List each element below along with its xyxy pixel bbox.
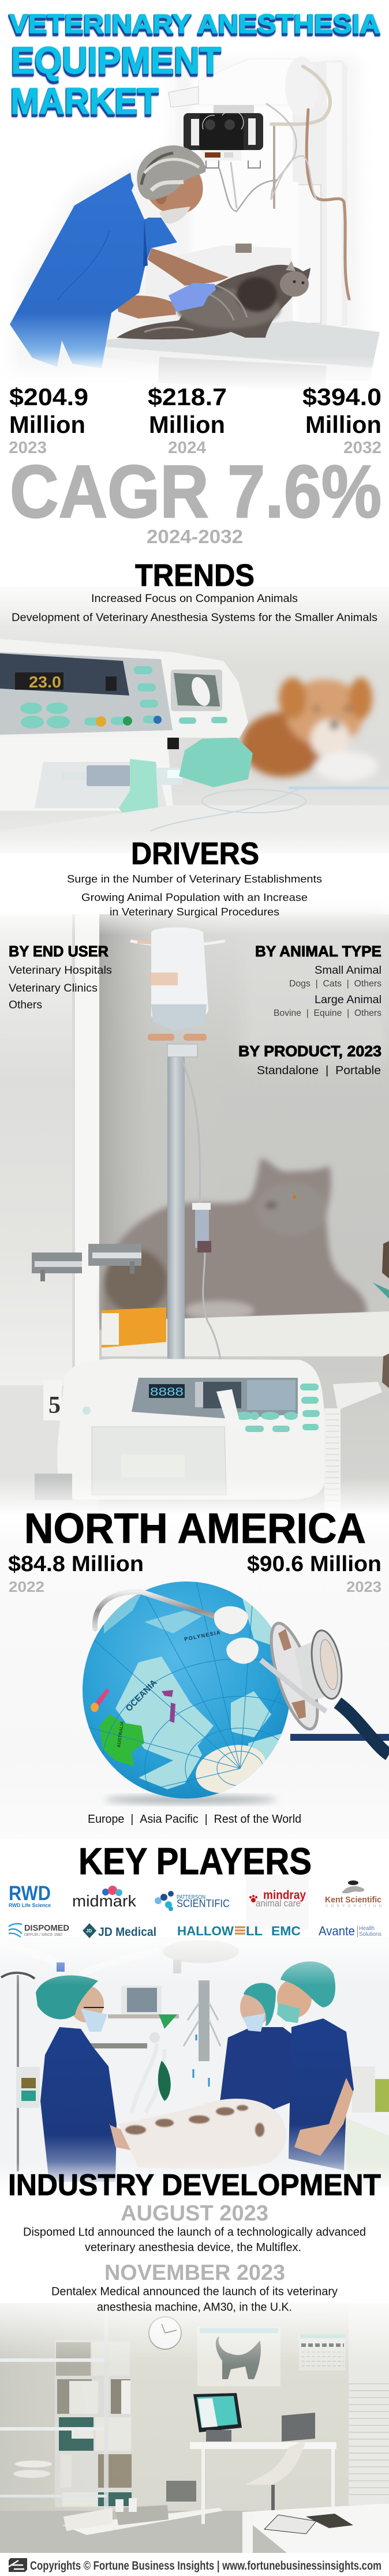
middle nurse [219,1983,300,2113]
segment: by end user: Veterinary Clinics [9,982,98,994]
segment: by animal type [255,943,381,1018]
pump panel [83,1378,320,1433]
drivers heading: DRIVERS [131,836,259,871]
anatomy poster [197,2327,280,2386]
title [9,9,380,122]
arm far [148,248,229,286]
globe with stethoscope: AUSTRALIA [116,1721,125,1748]
region values [8,1552,381,1595]
logo: Dispomed [9,1923,69,1937]
logo: Hallowell EMC: LL [246,1924,263,1938]
drivers text: Surge in the Number of Veterinary Establishments [67,873,322,885]
development: November 2023: anesthesia machine, AM30, in the U.K. [97,2301,292,2313]
hero photo: veterinarian with cat at x-ray table [0,57,389,392]
shelf and orange bowl [102,1307,389,1356]
stat: 2032 value: $394.0 [302,383,381,410]
globe with stethoscope [83,1582,389,1807]
logos: second row [9,1923,381,1939]
logo: Hallowell EMC: HALLOW [177,1924,234,1938]
machine and table fade [0,355,389,392]
cage number label [43,1380,62,1420]
development: August 2023: veterinary anesthesia device, the Multiflex. [85,2241,301,2254]
segment: by end user [9,943,112,1011]
table back and clamp [144,245,293,323]
IV stand [1,1973,40,2171]
desk, chair, computer [190,2393,336,2524]
logo: Hallowell EMC: EMC [271,1924,301,1938]
region values: 2022 [9,1578,44,1595]
development: November 2023: Dentalex Medical announced the launch of its veterinary [51,2286,338,2298]
floor [0,2511,389,2553]
glove [169,283,216,312]
development: August 2023: AUGUST 2023 [121,2201,268,2226]
breathing tube rack [184,1980,220,2087]
stat: 2032 value: 2032 [343,439,381,457]
coil cable and clamp [324,1382,382,1511]
logo: Avante [319,1924,381,1938]
pump panel: 8888 [150,1386,184,1399]
logo: JD Medical: JD Medical [98,1926,156,1939]
globe land [104,1587,289,1789]
logo: Patterson Scientific: SCIENTIFIC [177,1898,230,1909]
glass table top [99,321,380,392]
globe grid [89,1582,287,1797]
soft halo [12,58,361,375]
glass partition [0,2303,109,2553]
segment: by animal type: Bovine | Equine | Others [274,1008,381,1018]
surgery photo: nurses with dog [0,1875,389,2194]
segment: by product [238,1042,381,1077]
logos: first row [9,1880,381,1911]
clock [149,2317,181,2349]
logo: Kent Scientific: CORPORATION [326,1905,381,1908]
logo: Dispomed: DEPUIS / SINCE 1982 [24,1933,62,1937]
infusion pump body [57,1359,326,1500]
right nurse [277,1961,354,2170]
footer [0,2553,389,2576]
development: November 2023 [51,2261,338,2313]
lamp [0,1940,239,1974]
development: August 2023: Dispomed Ltd announced the launch of a technologically advanced [23,2226,366,2238]
logo: Kent Scientific [325,1880,381,1908]
stat: 2024 value [148,383,227,457]
development: November 2023: NOVEMBER 2023 [104,2261,285,2285]
right side counter [346,2066,389,2188]
pump lower body [0,738,173,811]
stethoscope [95,1592,389,1755]
segment: by animal type: Large Animal [315,994,381,1006]
surface and tubing [0,805,389,853]
antarctica [196,1745,265,1793]
title: VETERINARY ANESTHESIA [9,9,380,39]
drivers text: Growing Animal Population with an Increase [81,892,308,903]
industry development heading: INDUSTRY DEVELOPMENT [8,2169,381,2202]
syringe [61,765,214,786]
drivers text overlapping photo: in Veterinary Surgical Procedures [110,906,279,918]
globe with stethoscope: OCEANIA [124,1678,159,1714]
segment: by end user: Veterinary Hospitals [9,964,112,977]
globe with stethoscope: POLYNESIA [184,1629,221,1642]
stat: 2024 value: 2024 [168,439,206,457]
dog on table [118,2099,286,2169]
region values: 2023 [346,1578,381,1595]
pump casing [0,639,248,738]
logo: mindray animal care: mindray [263,1889,306,1902]
CAGR headline: 2024-2032 [147,526,243,547]
segment: by product: Standalone | Portable [257,1064,381,1077]
instrument table [62,2481,223,2535]
cat on table [117,261,311,339]
logo: Kent Scientific: Kent Scientific [325,1895,381,1905]
trends text: Increased Focus on Companion Animals [91,593,298,605]
logo: Dispomed: DISPOMED [24,1923,69,1933]
region values: $90.6 Million [247,1552,381,1576]
logo: mindray animal care: animal care [256,1898,301,1909]
left nurse [36,1975,167,2182]
logo: Patterson Scientific: PATTERSON [177,1894,205,1901]
australia [99,1714,144,1766]
north america background [0,1516,389,1839]
white table foreground [242,2504,389,2553]
trends photo: infusion pump with dog [0,586,389,853]
segment: by animal type: Small Animal [315,964,381,977]
stat: 2024 value: Million [149,411,225,438]
shelves [55,2340,132,2507]
logo: Avante: Health [359,1926,375,1932]
segment: by end user: BY END USER [9,943,109,960]
x-ray control box [184,111,263,168]
title: EQUIPMENT [11,39,221,81]
stat: 2032 value: Million [305,411,381,438]
trends text [12,593,377,624]
chestpiece back disc [262,1618,327,1734]
arm near [115,296,176,319]
stat: 2023 value: 2023 [9,439,47,457]
logo: Patterson Scientific [155,1891,230,1911]
office photo: veterinary consulting room [0,2302,389,2553]
logo: JD Medical: JD [86,1928,92,1934]
segment: by animal type: BY ANIMAL TYPE [255,943,381,960]
x-ray tube head [169,57,317,117]
cage door [0,914,72,1388]
door latches [32,1244,141,1281]
pump screen [171,670,222,711]
segment: by end user: Others [9,999,42,1011]
segment: by product: BY PRODUCT, 2023 [238,1042,381,1060]
IV pole [167,1056,185,1359]
head [144,170,203,215]
north america heading: NORTH AMERICA [24,1505,366,1552]
trends heading: TRENDS [135,558,255,593]
cage number label: 5 [48,1392,61,1419]
chestpiece stem and front disc [294,1635,334,1703]
logo: RWD: RWD Life Science [9,1902,51,1908]
logo: midmark: midmark [72,1892,137,1910]
stat: 2024 value: $218.7 [148,383,227,410]
logo: RWD: RWD [9,1882,51,1905]
drivers text [67,873,322,903]
trends text: Development of Veterinary Anesthesia Systems for the Smaller Animals [12,612,377,624]
blurred dog [241,678,378,782]
cage photo: cat, IV pole and infusion pump [0,914,389,1518]
logo: mindray animal care [249,1889,306,1909]
trends photo: infusion pump with dog: 23.0 [29,673,61,691]
IV tube and drip chamber [181,1057,223,1391]
logo: Avante: Solutions [359,1931,381,1938]
blue scrubs [10,173,177,368]
logo: Avante: Avante [319,1924,355,1938]
IV bottle [130,928,225,1057]
stat: 2023 value: $204.9 [9,383,88,410]
key players heading: KEY PLAYERS [78,1840,312,1882]
pump buttons [20,666,227,728]
stat: 2023 value: Million [9,411,85,438]
window blinds [349,2303,389,2505]
stat: 2032 value [302,383,381,457]
development: August 2023 [23,2201,366,2254]
teal syringe clamps [179,738,253,787]
cat [102,1158,367,1322]
cables [219,66,349,299]
title: MARKET [10,80,159,122]
breeds poster [299,2334,345,2371]
segment: by animal type: Dogs | Cats | Others [289,979,381,989]
hinge [35,1474,72,1500]
logo: Hallowell EMC [177,1924,301,1938]
veterinarian [10,145,229,368]
x-ray machine column [291,60,347,326]
other regions: Europe | Asia Pacific | Rest of the World [88,1813,301,1826]
logo: JD Medical [83,1923,156,1939]
icon: Fortune Business Insights logo [9,2558,27,2572]
stat: 2023 value [9,383,88,457]
anesthesia monitor [89,1986,179,2113]
region values: $84.8 Million [8,1552,144,1576]
